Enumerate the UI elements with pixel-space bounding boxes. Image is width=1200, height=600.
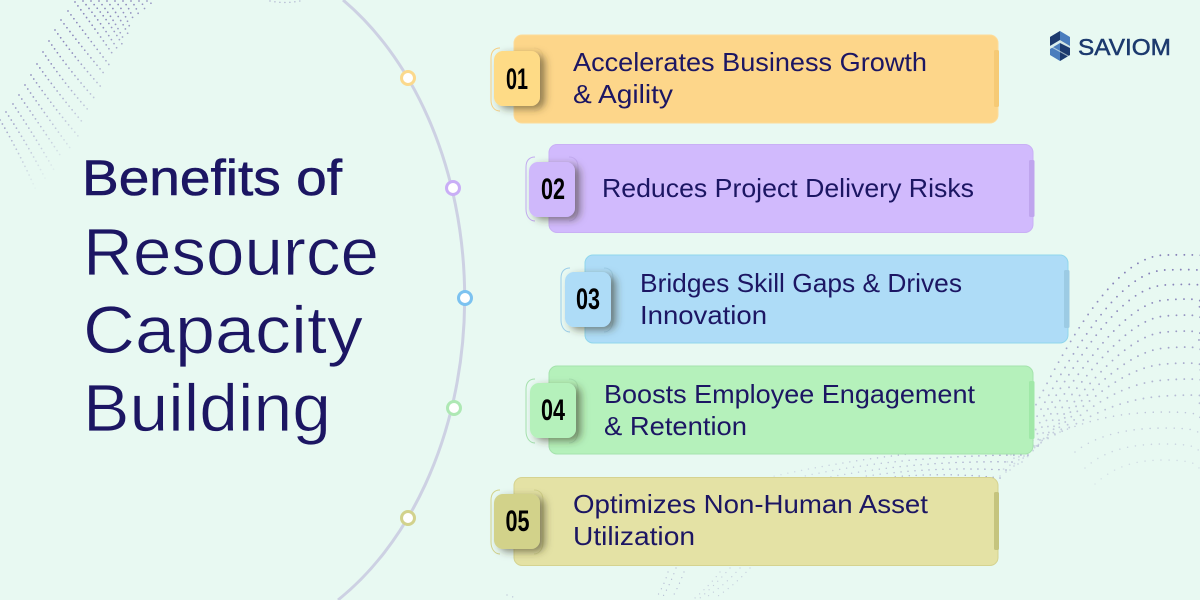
title: Resource <box>83 215 379 290</box>
number badge <box>565 272 611 327</box>
card text: Accelerates Business Growth <box>573 47 927 77</box>
number bracket <box>491 48 543 111</box>
side tab <box>1029 160 1034 217</box>
number bracket <box>526 379 578 443</box>
card text: & Agility <box>573 79 673 109</box>
timeline node 2 <box>446 182 460 194</box>
timeline node 5 <box>402 512 414 524</box>
number bracket <box>491 490 543 554</box>
timeline node 4 <box>448 402 460 414</box>
dot wave: bottom <box>507 446 1038 598</box>
number: 04 <box>541 394 565 427</box>
dot wave: top left <box>0 1 300 190</box>
timeline node 3 <box>458 292 472 304</box>
number badge <box>494 51 540 106</box>
number: 03 <box>576 283 600 316</box>
card text: Optimizes Non-Human Asset <box>573 489 929 519</box>
timeline node 1 <box>402 72 414 84</box>
card 2 <box>526 144 1034 232</box>
card 3 <box>561 255 1070 343</box>
dot wave: right <box>1000 255 1200 484</box>
number: 02 <box>541 173 565 206</box>
card text: Reduces Project Delivery Risks <box>602 173 974 203</box>
number: 05 <box>506 505 530 538</box>
card 5 <box>491 478 999 566</box>
number bracket <box>526 157 578 221</box>
number badge <box>494 494 540 549</box>
side tab <box>1064 270 1070 328</box>
number: 01 <box>506 63 528 96</box>
side tab <box>1029 381 1034 439</box>
logo wordmark: SAVIOM <box>1078 34 1171 60</box>
logo: Saviom <box>1050 31 1171 61</box>
card 1 <box>491 35 999 123</box>
card text: Boosts Employee Engagement <box>604 379 976 409</box>
number bracket <box>561 268 613 332</box>
card text: Bridges Skill Gaps & Drives <box>640 268 962 298</box>
card text: & Retention <box>604 411 747 441</box>
logo hexagon icon <box>1050 31 1070 61</box>
number badge <box>530 383 576 438</box>
card text: Utilization <box>573 521 695 551</box>
title: Building <box>83 371 331 446</box>
title <box>82 150 379 446</box>
title: Capacity <box>83 293 364 368</box>
card text: Innovation <box>640 300 767 330</box>
side tab <box>994 50 999 107</box>
number badge <box>529 162 575 217</box>
curved timeline <box>338 0 472 600</box>
title: Benefits of <box>82 150 342 206</box>
side tab <box>994 492 999 550</box>
card 4 <box>526 366 1034 454</box>
